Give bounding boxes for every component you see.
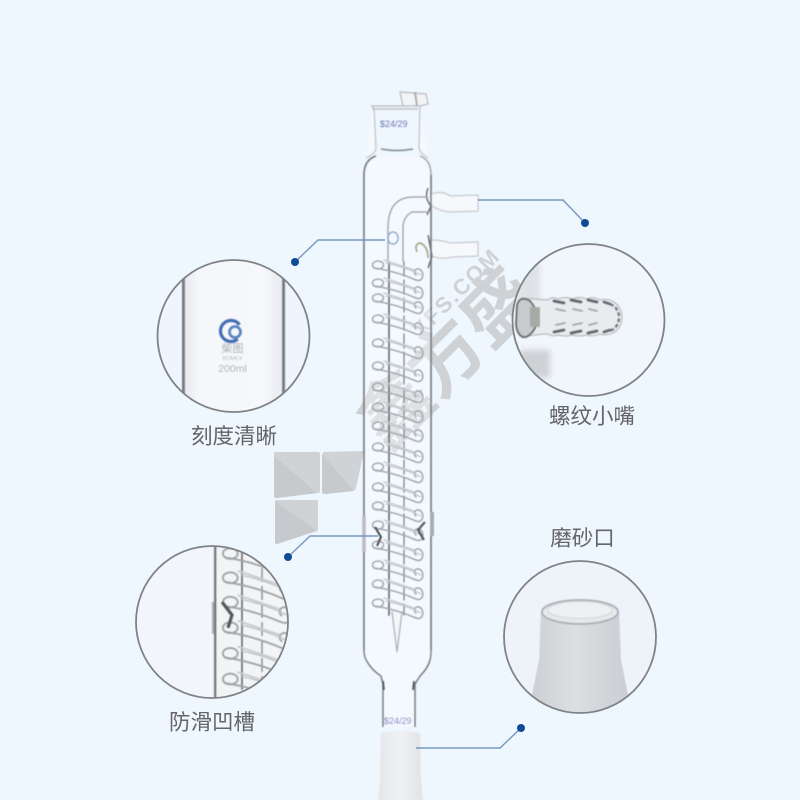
central tubes <box>389 262 404 652</box>
top joint: $24/29 <box>380 119 408 129</box>
outer jacket <box>364 156 431 727</box>
side arms <box>416 188 478 268</box>
panel: clear graduation <box>158 255 310 420</box>
label: anti-slip groove: 防滑凹槽 <box>169 710 255 734</box>
icon: brand logo <box>218 318 242 344</box>
top joint <box>366 92 428 158</box>
watermark: brand text: XFS.COM <box>407 243 505 342</box>
lower ground joint <box>378 731 423 800</box>
leader: ground mouth <box>416 724 525 748</box>
label: threaded nozzle: 螺纹小嘴 <box>549 404 635 428</box>
panel: anti-slip groove <box>136 540 295 705</box>
leader: groove <box>284 536 378 561</box>
leader: threaded nozzle <box>478 200 589 227</box>
panel: threaded nozzle <box>512 244 664 396</box>
label: clear graduation: 刻度清晰 <box>191 424 277 448</box>
panel: ground mouth <box>504 561 656 715</box>
outer jacket: $24/29 <box>384 716 412 726</box>
panel: clear graduation: 200ml <box>218 363 247 375</box>
coil turns <box>372 260 423 618</box>
inner tube bend <box>388 197 428 262</box>
leader: graduation <box>291 240 385 266</box>
watermark: logo squares <box>274 451 364 544</box>
panel: clear graduation: BOMEX <box>223 356 243 362</box>
grooves <box>364 512 432 552</box>
watermark: brand text: 鑫方盛 <box>343 254 552 463</box>
panel: clear graduation: 柴图 <box>222 341 244 355</box>
condenser: glass apparatus <box>364 92 478 800</box>
label: ground mouth: 磨砂口 <box>550 526 615 550</box>
